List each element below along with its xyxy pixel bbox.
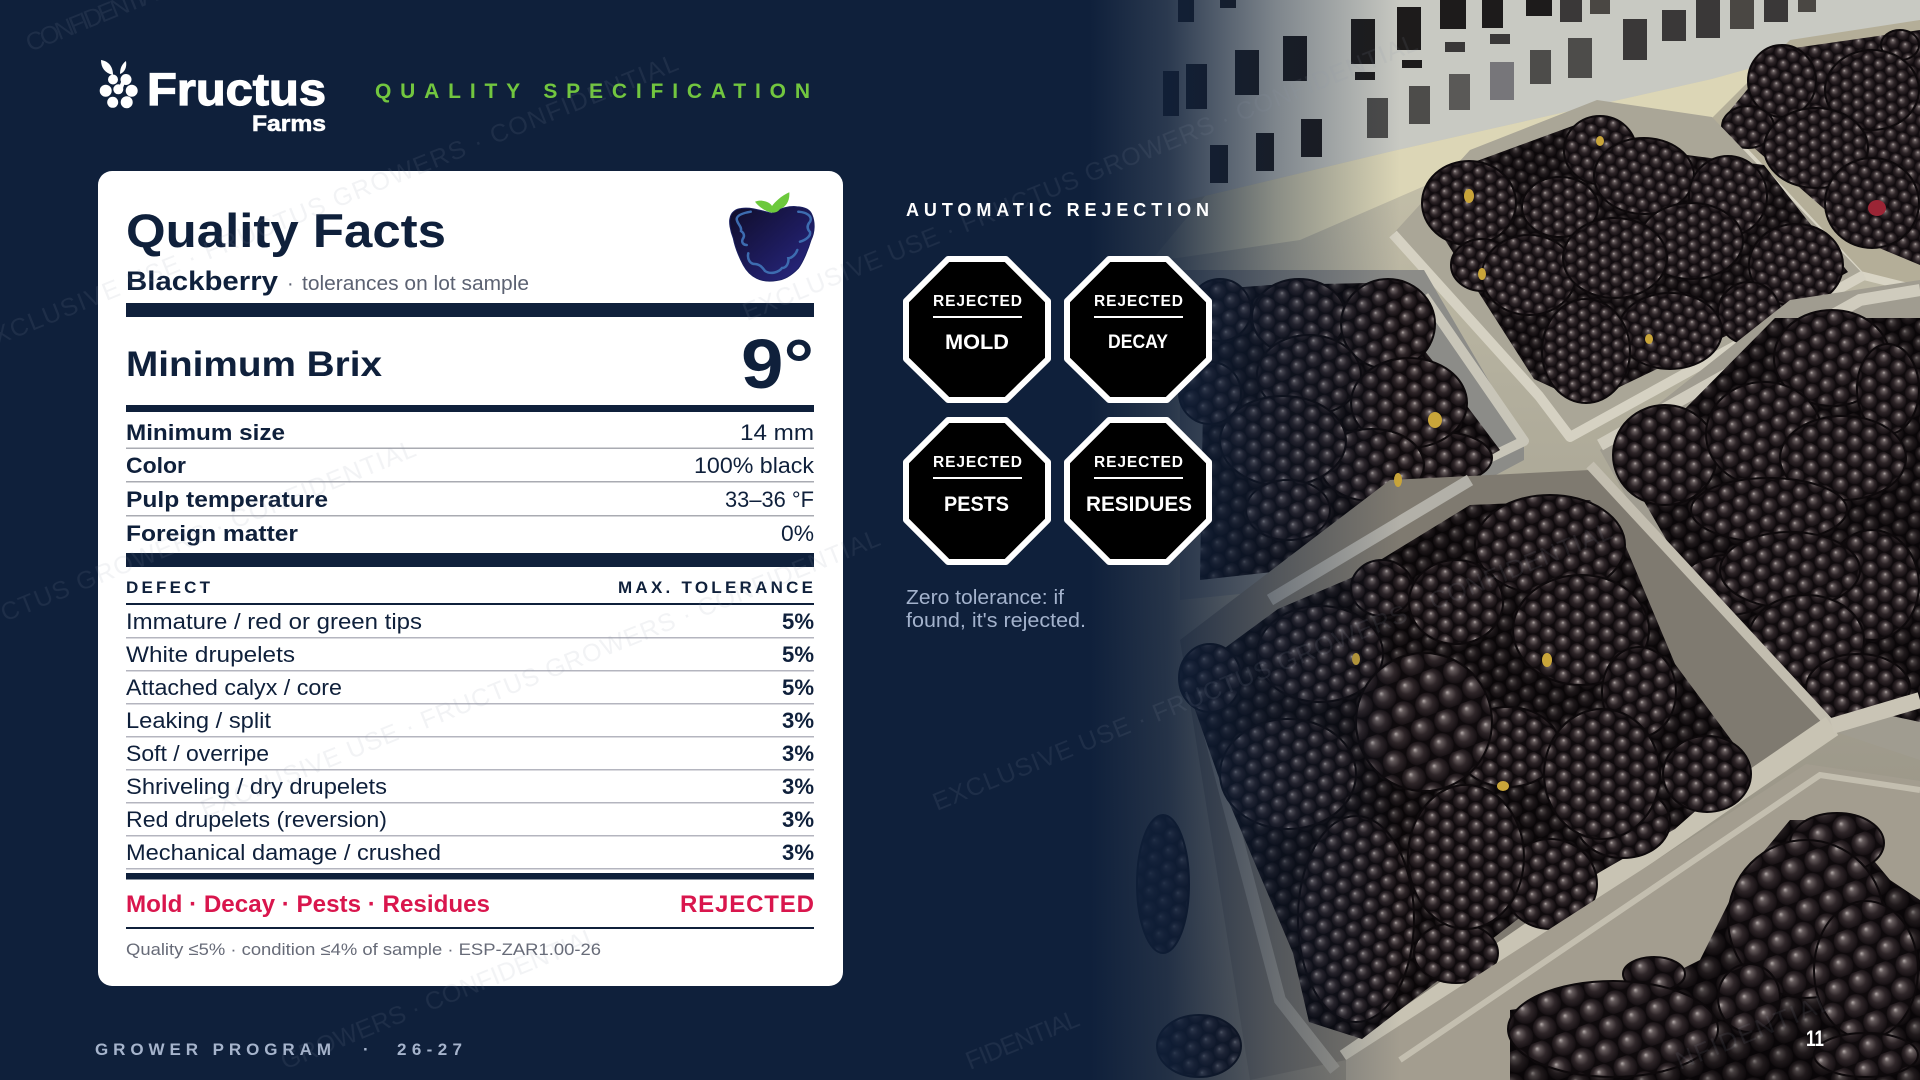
spec: foreign matter — [126, 521, 814, 546]
defect: shriveling: 3% — [782, 774, 814, 799]
spec: pulp temperature: Pulp temperature — [126, 487, 328, 512]
badge: decay: DECAY — [1108, 332, 1168, 353]
defect: leaking — [126, 708, 814, 738]
defect: immature — [126, 609, 814, 638]
defect table header — [126, 578, 814, 605]
defect: shriveling — [126, 774, 814, 804]
calyx and red spots — [1352, 136, 1886, 791]
footer: · — [363, 1040, 369, 1059]
defect table header: DEFECT — [126, 578, 211, 597]
divider bar bottom — [126, 873, 814, 880]
defect: mechanical — [126, 840, 814, 870]
divider bar middle — [126, 553, 814, 567]
card title: Quality Facts — [126, 204, 446, 257]
divider bar top — [126, 303, 814, 317]
logo sub wordmark: Farms — [252, 111, 326, 136]
badge: pests: PESTS — [944, 493, 1009, 516]
defect: mechanical: 3% — [782, 840, 814, 865]
defect: attached calyx: Attached calyx / core — [126, 675, 342, 700]
faded berries bottom left — [1137, 815, 1241, 1077]
defect: soft: Soft / overripe — [126, 741, 269, 766]
logo — [100, 60, 326, 136]
badge: mold: REJECTED — [933, 293, 1022, 310]
panel: quality facts card — [98, 171, 843, 986]
rejected row: Mold · Decay · Pests · Residues — [126, 891, 490, 918]
rejected row — [126, 891, 814, 929]
defect: soft: 3% — [782, 741, 814, 766]
divider bar — [126, 405, 814, 412]
icon: blackberry — [730, 192, 814, 281]
defect: soft — [126, 741, 814, 770]
watermark: NFIDENTIAL — [1672, 988, 1835, 1076]
badge: residues — [1067, 420, 1209, 562]
tray: bottom right — [1346, 700, 1920, 1080]
badge: pests — [906, 420, 1048, 562]
minimum brix row: Minimum Brix — [126, 345, 383, 384]
spec: minimum size — [126, 420, 814, 449]
card subtitle: Blackberry — [126, 266, 278, 296]
defect: white drupelets: 5% — [782, 642, 814, 667]
defect: immature: Immature / red or green tips — [126, 609, 422, 634]
header label: QUALITY SPECIFICATION — [375, 80, 810, 103]
footer: GROWER PROGRAM — [95, 1040, 331, 1059]
watermark: GROWERS · CONFIDENTIAL — [277, 922, 603, 1076]
spec: color — [126, 453, 815, 482]
spec: color: Color — [126, 453, 186, 478]
defect: mechanical: Mechanical damage / crushed — [126, 840, 441, 865]
tray: upper centre — [1393, 100, 1864, 437]
defect: white drupelets: White drupelets — [126, 642, 295, 667]
rejected row: REJECTED — [680, 891, 814, 918]
defect: white drupelets — [126, 642, 814, 672]
tray: right middle — [1600, 280, 1920, 760]
note: zero tolerance: found, it's rejected. — [906, 610, 1086, 632]
minimum brix row: 9° — [741, 325, 814, 403]
section heading: automatic rejection: AUTOMATIC REJECTION — [906, 200, 1209, 220]
navy fade over photo — [1000, 0, 1420, 1080]
tray: top right — [1700, 20, 1920, 290]
card subtitle — [126, 266, 529, 296]
defect: immature: 5% — [782, 609, 814, 634]
logo icon — [100, 60, 138, 108]
defect: red drupelets — [126, 807, 814, 836]
badge: residues: REJECTED — [1094, 454, 1183, 471]
watermark: EXCLUSIVE USE · FRUCTUS GROWERS · CONFIDENTIAL — [929, 517, 1616, 817]
badges: rejection octagons — [906, 259, 1209, 562]
defect: shriveling: Shriveling / dry drupelets — [126, 774, 387, 799]
badge: decay: REJECTED — [1094, 293, 1183, 310]
plastic crate — [1000, 0, 1920, 262]
watermark: CTUS GROWERS · CONFIDENTIAL — [0, 435, 420, 628]
card background — [98, 171, 843, 986]
defect table header: MAX. TOLERANCE — [618, 578, 813, 597]
watermark: FIDENTIAL — [962, 1005, 1084, 1076]
badge: residues: RESIDUES — [1086, 493, 1192, 516]
spec: foreign matter: 0% — [781, 521, 814, 546]
badge: decay — [1067, 259, 1209, 400]
logo wordmark: Fructus — [147, 64, 326, 115]
watermark: EXCLUSIVE USE · FRUCTUS GROWERS · CONFIDENTIAL — [197, 524, 884, 824]
badge: pests: REJECTED — [933, 454, 1022, 471]
defect: attached calyx: 5% — [782, 675, 814, 700]
footer — [95, 1040, 462, 1059]
spec rows — [126, 420, 815, 546]
card footnote: Quality ≤5% · condition ≤4% of sample · ESP-ZAR1.00-26 — [126, 940, 601, 959]
minimum brix row — [126, 325, 814, 403]
watermark: EXCLUSIVE USE · FRUCTUS GROWERS · CONFIDENTIAL — [739, 29, 1422, 327]
spec: minimum size: 14 mm — [740, 420, 814, 445]
spec: pulp temperature — [126, 487, 814, 516]
card subtitle: tolerances on lot sample — [302, 273, 529, 295]
tray: left middle — [1179, 270, 1524, 600]
spec: pulp temperature: 33–36 °F — [725, 487, 814, 512]
card subtitle: · — [287, 273, 294, 295]
defect: red drupelets: Red drupelets (reversion) — [126, 807, 387, 832]
note: zero tolerance — [906, 587, 1086, 632]
tray: large centre — [1179, 465, 1832, 1080]
badge: mold — [906, 259, 1048, 400]
photo base — [1000, 0, 1920, 1080]
defect: attached calyx — [126, 675, 814, 704]
spec: color: 100% black — [694, 453, 815, 478]
spec: minimum size: Minimum size — [126, 420, 285, 445]
photo: blackberries in clamshell trays — [1000, 0, 1920, 1080]
defect rows — [126, 609, 814, 870]
page number: 11 — [1806, 1026, 1824, 1051]
footer: 26-27 — [397, 1040, 462, 1059]
defect: red drupelets: 3% — [782, 807, 814, 832]
badge: mold: MOLD — [945, 331, 1009, 354]
defect: leaking: 3% — [782, 708, 814, 733]
note: zero tolerance: Zero tolerance: if — [906, 587, 1064, 609]
defect: leaking: Leaking / split — [126, 708, 271, 733]
spec: foreign matter: Foreign matter — [126, 521, 298, 546]
